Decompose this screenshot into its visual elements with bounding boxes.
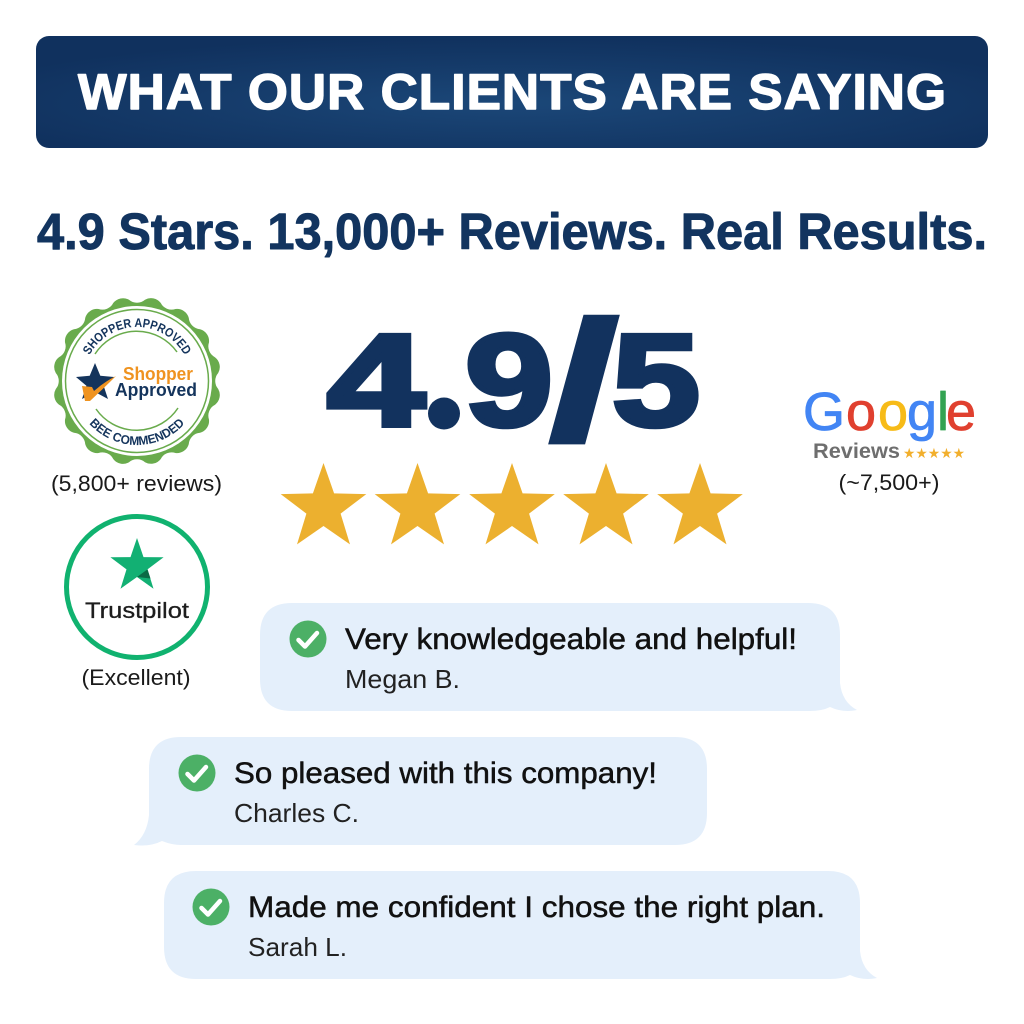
logo wordmark: Shopper [123, 364, 193, 384]
big rating: 5 [612, 306, 700, 454]
google wordmark: o [846, 382, 876, 442]
big rating: . [424, 297, 463, 454]
caption: Trustpilot rating: (Excellent) [82, 665, 190, 690]
badge ring text: SHOPPER APPROVED [83, 318, 190, 354]
google wordmark: o [878, 382, 908, 442]
subtitle: 4.9 Stars. 13,000+ Reviews. Real Results. [37, 203, 987, 260]
big rating: / [551, 289, 617, 474]
icon: shopper star [76, 363, 116, 401]
google wordmark: G [803, 382, 845, 442]
title: WHAT OUR CLIENTS ARE SAYING [78, 64, 947, 120]
google wordmark: g [907, 382, 937, 442]
icon: check [178, 754, 216, 792]
five gold stars [281, 463, 743, 544]
reviews label: Reviews [813, 440, 900, 463]
review bubble: Sarah L. [164, 871, 877, 979]
quote: Very knowledgeable and helpful! [345, 623, 797, 656]
Google Reviews logo [803, 382, 976, 463]
caption: Google count: (~7,500+) [838, 470, 940, 495]
badge: Shopper Approved [54, 298, 220, 464]
review bubble: Megan B. [260, 603, 857, 711]
reviewer name: Sarah L. [248, 932, 347, 962]
big rating: 4 [327, 306, 425, 454]
icon: check [290, 620, 326, 658]
big rating: 9 [465, 306, 553, 454]
quote: Made me confident I chose the right plan. [248, 891, 825, 924]
badge: Shopper Approved: Approved [115, 380, 197, 400]
google wordmark: e [946, 382, 976, 442]
badge: Shopper Approved: BEE COMMENDED [90, 418, 183, 446]
google wordmark: l [937, 382, 949, 442]
caption: Shopper Approved count: (5,800+ reviews) [51, 471, 222, 496]
quote: So pleased with this company! [234, 757, 657, 790]
reviewer name: Charles C. [234, 798, 359, 828]
header banner [36, 36, 988, 148]
review bubble: Charles C. [134, 737, 707, 846]
badge: Trustpilot [66, 516, 208, 658]
small stars: ★★★★★ [903, 446, 965, 462]
trustpilot wordmark: Trustpilot [85, 598, 189, 623]
icon: trustpilot star [110, 538, 164, 589]
reviewer name: Megan B. [345, 664, 460, 694]
icon: check [192, 888, 230, 926]
big rating [327, 289, 700, 474]
